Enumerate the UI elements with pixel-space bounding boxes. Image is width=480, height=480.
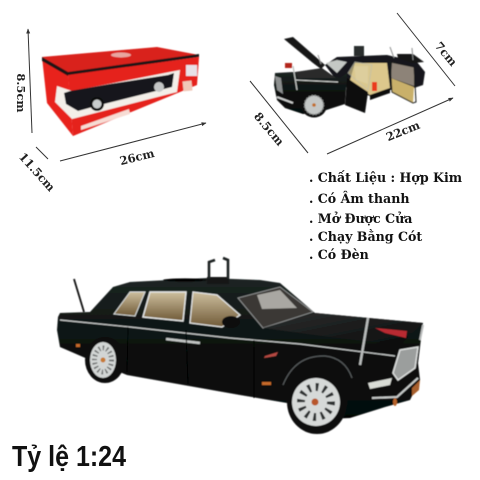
front tyre <box>287 370 347 434</box>
aerial right <box>223 258 228 279</box>
main car front fender arc <box>283 356 352 385</box>
scale label: Tỷ lệ 1:24 <box>12 441 126 473</box>
feature: lights: . Có Đèn <box>309 247 369 262</box>
box length label: 26cm <box>118 146 156 168</box>
box window <box>55 70 180 119</box>
open car rear aerials <box>390 47 413 60</box>
front rim spokes <box>301 387 331 417</box>
rear rim <box>90 342 116 378</box>
main car badge <box>264 352 278 358</box>
open car interior <box>350 63 390 95</box>
open car rear door frame <box>390 62 416 103</box>
main car chrome belt line <box>60 320 395 356</box>
main car door handles <box>166 339 200 343</box>
main car hood pole <box>360 318 368 365</box>
main car orange lamp <box>393 398 397 406</box>
box left end <box>42 57 73 136</box>
aerial base <box>207 277 229 284</box>
front hub <box>312 398 318 406</box>
main car antenna <box>74 279 84 312</box>
boxed car rim <box>92 100 102 108</box>
boxed car rear wheel <box>154 82 164 92</box>
open car depth arrow <box>397 13 455 86</box>
main car bumper <box>372 378 418 398</box>
main car mirror <box>222 316 240 328</box>
open car roof mount <box>354 46 364 56</box>
main car body <box>57 278 423 420</box>
main car middle window <box>143 292 186 321</box>
open car sill <box>370 88 390 100</box>
open car front wheel <box>301 92 327 118</box>
feature list <box>309 170 463 262</box>
open car windshield <box>326 60 347 73</box>
main car rear wheel <box>85 337 125 383</box>
open car rear door panel <box>391 78 414 103</box>
main car front pole <box>420 325 423 340</box>
product box <box>42 47 199 136</box>
aerial left <box>209 260 215 279</box>
rear rim spokes <box>94 348 112 372</box>
feature: doors: . Mở Được Cửa <box>309 211 412 226</box>
front rim <box>292 378 340 426</box>
open car engine bay <box>295 68 336 78</box>
open car hood <box>284 37 325 69</box>
box small label <box>182 81 192 91</box>
boxed car <box>64 73 174 111</box>
main car hood flag <box>375 328 407 338</box>
open car rear body and roof <box>325 55 425 96</box>
open car flag <box>285 63 297 90</box>
hub <box>312 103 316 107</box>
windshield reflection <box>257 290 297 309</box>
box brand strip <box>81 109 130 130</box>
open car rear door window <box>391 62 414 86</box>
rim <box>304 96 324 114</box>
main car rear marker <box>76 344 80 347</box>
main car headlight <box>368 378 392 389</box>
open car bumper <box>277 97 293 103</box>
open car length label: 22cm <box>384 118 422 144</box>
open car front door <box>345 78 368 113</box>
open car grille <box>275 76 283 94</box>
main car rear quarter window <box>114 292 145 316</box>
rear hub <box>100 358 106 362</box>
flag cloth <box>285 63 292 68</box>
main car <box>57 258 423 434</box>
flag pole <box>293 66 297 90</box>
main car number plate <box>412 380 420 396</box>
main car windshield <box>238 287 313 328</box>
box height label: 8.5cm <box>14 73 28 113</box>
main car hood <box>263 313 423 345</box>
box depth label: 11.5cm <box>16 150 58 194</box>
main car front side window <box>190 292 240 327</box>
main car grille <box>393 347 418 380</box>
tyre <box>301 92 327 118</box>
box top lid <box>42 47 199 73</box>
box badge <box>186 65 197 76</box>
box depth line <box>36 147 48 159</box>
open car height line <box>250 81 308 153</box>
rear tyre <box>85 337 125 383</box>
main car sunroof <box>163 278 207 282</box>
box front face <box>68 57 199 136</box>
feature: material: . Chất Liệu : Hợp Kim <box>309 170 463 185</box>
feature: sound: . Có Âm thanh <box>309 191 410 206</box>
main car side marker <box>262 382 271 385</box>
feature: clockwork: . Chạy Bằng Cót <box>309 229 422 244</box>
boxed car front wheel <box>90 97 104 111</box>
open car hood stay <box>318 55 321 64</box>
box logo on lid <box>111 52 131 58</box>
open car trunk lid <box>397 54 424 63</box>
open car height label: 8.5cm <box>251 109 287 149</box>
main car roof aerials <box>207 258 229 284</box>
open car front door window <box>348 62 372 90</box>
main car front wheel <box>287 370 347 434</box>
box lid dark edge <box>42 54 199 76</box>
main car door seams <box>127 327 254 398</box>
box length arrow <box>60 123 206 161</box>
open car red light <box>372 82 377 91</box>
open car front body <box>274 72 347 114</box>
open car length arrow <box>327 98 453 154</box>
open car width label: 7cm <box>432 39 460 69</box>
open-door car <box>274 37 425 118</box>
open car chrome strip <box>295 80 338 82</box>
box height arrow <box>28 29 32 133</box>
open car seat back <box>354 66 368 84</box>
boxed car body <box>64 73 174 111</box>
